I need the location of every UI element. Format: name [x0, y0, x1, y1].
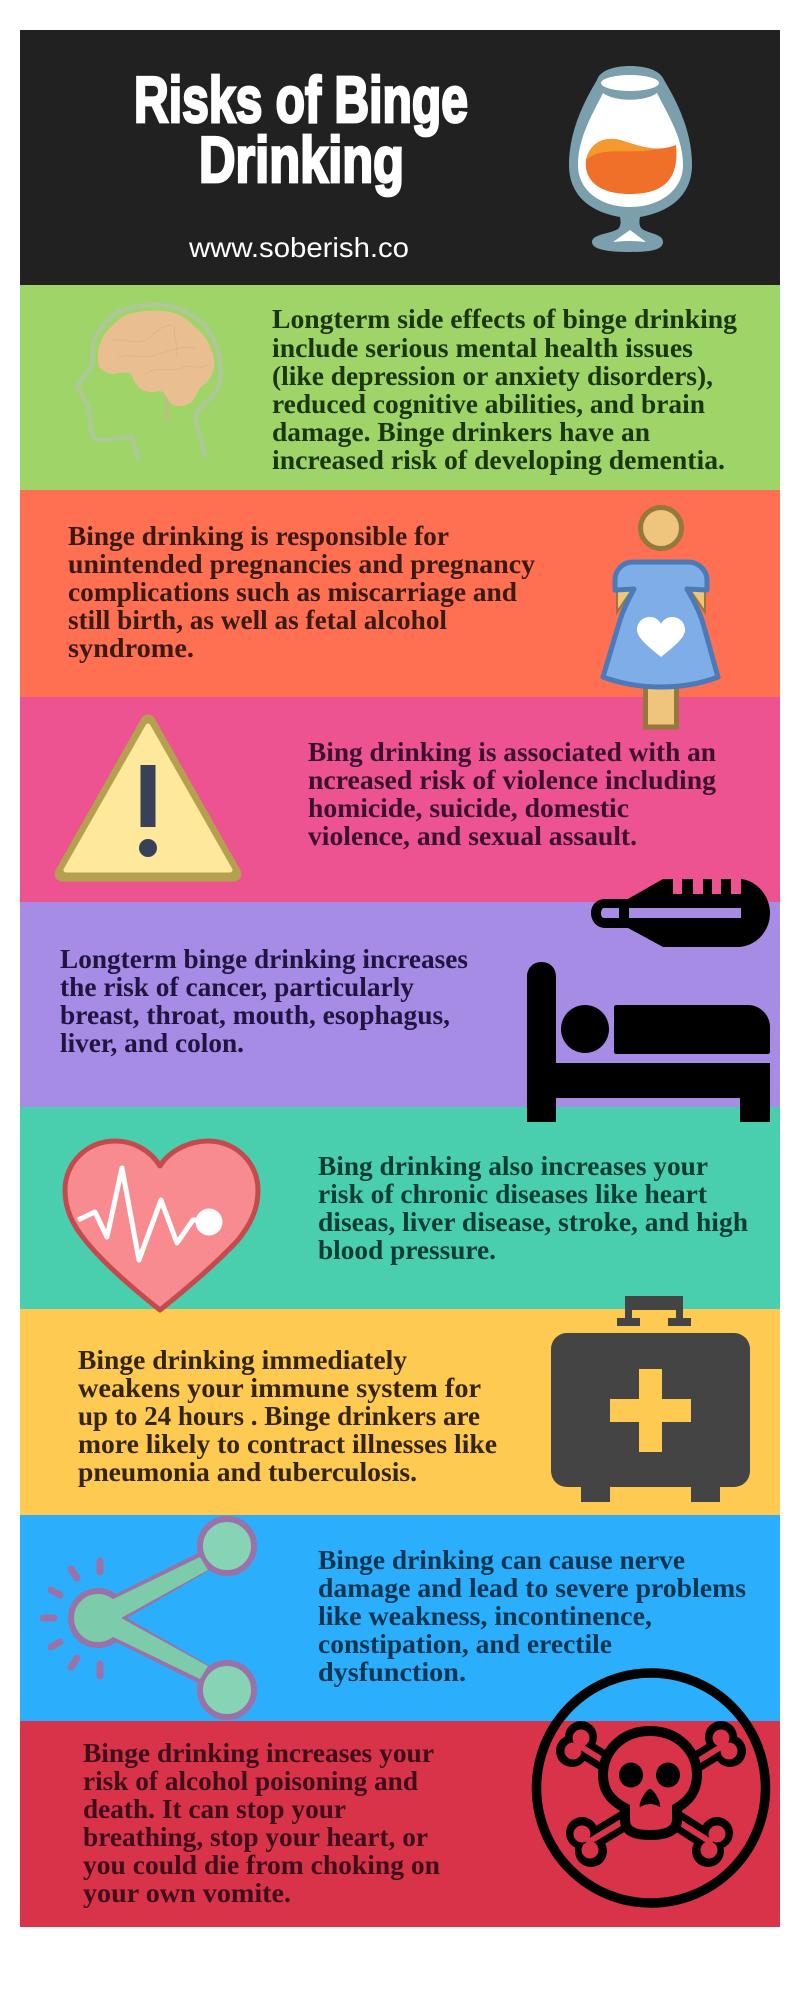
- text: brain: increased risk of developing dementia.: [272, 445, 725, 475]
- text: brain: damage. Binge drinkers have an: [272, 417, 650, 447]
- title: [134, 63, 468, 196]
- panel: cancer: [20, 902, 780, 1107]
- text: alcohol poisoning: you could die from choking on: [83, 1850, 440, 1880]
- text: immune system: [78, 1345, 497, 1487]
- text: cancer: [60, 944, 468, 1058]
- text: chronic disease: [318, 1151, 748, 1265]
- icon: warning triangle: [62, 722, 234, 874]
- text: cancer: the risk of cancer, particularly: [60, 972, 414, 1002]
- text: violence: ncreased risk of violence including: [308, 765, 717, 795]
- text: brain: include serious mental health issues: [272, 333, 693, 363]
- text: violence: violence, and sexual assault.: [308, 821, 637, 851]
- text: pregnancy: unintended pregnancies and pregnancy: [68, 549, 536, 579]
- text: chronic disease: diseas, liver disease, stroke, and high: [318, 1207, 748, 1237]
- website url: www.soberish.co: [188, 232, 409, 263]
- text: nerve damage: like weakness, incontinence,: [318, 1601, 652, 1631]
- text: alcohol poisoning: your own vomite.: [83, 1878, 291, 1908]
- text: alcohol poisoning: Binge drinking increases your: [83, 1738, 434, 1768]
- text: brain: reduced cognitive abilities, and brain: [272, 389, 705, 419]
- panel: chronic disease: [20, 1107, 780, 1309]
- text: immune system: weakens your immune system for: [78, 1373, 481, 1403]
- text: violence: [308, 737, 717, 851]
- text: immune system: up to 24 hours . Binge drinkers are: [78, 1401, 480, 1431]
- text: chronic disease: risk of chronic diseases like heart: [318, 1179, 707, 1209]
- panel: alcohol poisoning: [20, 1721, 780, 1927]
- text: violence: homicide, suicide, domestic: [308, 793, 629, 823]
- text: immune system: pneumonia and tuberculosis.: [78, 1457, 417, 1487]
- text: brain: (like depression or anxiety disorders),: [272, 361, 713, 391]
- title: Drinking: [199, 123, 404, 196]
- text: pregnancy: [68, 521, 536, 663]
- icon: nerve nodes: [43, 1519, 254, 1717]
- text: alcohol poisoning: death. It can stop your: [83, 1794, 346, 1824]
- text: nerve damage: damage and lead to severe problems: [318, 1573, 746, 1603]
- icon: head with brain: [77, 305, 221, 458]
- text: immune system: Binge drinking immediately: [78, 1345, 408, 1375]
- icon: heart with pulse: [65, 1141, 258, 1310]
- icon: pregnant woman: [603, 508, 718, 727]
- icon: wine glass: [569, 66, 692, 252]
- panel: violence: [20, 697, 780, 902]
- icon: skull and crossbones: [536, 1673, 766, 1903]
- text: nerve damage: constipation, and erectile: [318, 1629, 612, 1659]
- text: alcohol poisoning: breathing, stop your heart, or: [83, 1822, 428, 1852]
- text: alcohol poisoning: [83, 1738, 440, 1908]
- text: cancer: Longterm binge drinking increases: [60, 944, 468, 974]
- text: violence: Bing drinking is associated with an: [308, 737, 716, 767]
- text: chronic disease: Bing drinking also increases your: [318, 1151, 708, 1181]
- title: Risks of Binge: [134, 63, 468, 136]
- icon: thermometer: [591, 879, 770, 947]
- text: chronic disease: blood pressure.: [318, 1235, 496, 1265]
- panel: nerve damage: [20, 1515, 780, 1721]
- text: brain: Longterm side effects of binge drinking: [272, 304, 738, 334]
- text: cancer: breast, throat, mouth, esophagus,: [60, 1000, 450, 1030]
- text: nerve damage: dysfunction.: [318, 1657, 466, 1687]
- text: cancer: liver, and colon.: [60, 1028, 244, 1058]
- text: immune system: more likely to contract illnesses like: [78, 1429, 497, 1459]
- text: alcohol poisoning: risk of alcohol poisoning and: [83, 1766, 418, 1796]
- panel: header: [20, 30, 780, 285]
- text: nerve damage: Binge drinking can cause nerve: [318, 1545, 685, 1575]
- icon: person in bed: [527, 962, 770, 1122]
- panel: brain and mental health: [20, 285, 780, 490]
- text: brain: [272, 304, 738, 475]
- text: pregnancy: still birth, as well as fetal alcohol: [68, 605, 448, 635]
- text: pregnancy: Binge drinking is responsible for: [68, 521, 449, 551]
- text: nerve damage: [318, 1545, 746, 1687]
- panel: immune system: [20, 1309, 780, 1515]
- text: pregnancy: complications such as miscarriage and: [68, 577, 517, 607]
- icon: first aid kit: [551, 1296, 750, 1502]
- text: pregnancy: syndrome.: [68, 633, 194, 663]
- panel: pregnancy: [20, 490, 780, 697]
